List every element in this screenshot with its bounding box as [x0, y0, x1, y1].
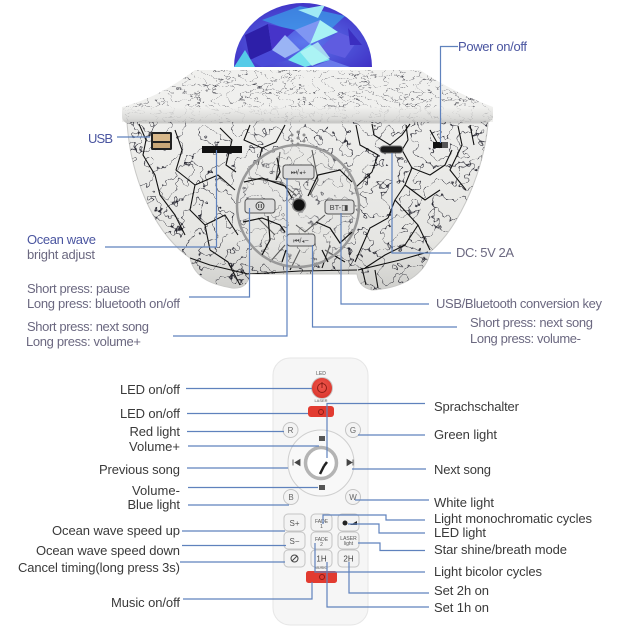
function buttons: FADE	[315, 519, 329, 525]
laser button	[308, 398, 334, 417]
remote labels right: Sprachschalter	[434, 399, 520, 414]
label: previous song button: Short press: next song	[470, 315, 593, 330]
colour button R	[283, 422, 298, 438]
colour button G	[346, 422, 360, 438]
bold cracks	[139, 124, 474, 288]
remote labels left: Ocean wave speed up	[52, 523, 180, 538]
label: previous song button: Long press: volume-	[470, 331, 581, 346]
remote labels right	[434, 399, 592, 615]
projector body	[120, 68, 496, 292]
remote labels right: White light	[434, 495, 494, 510]
remote labels left: Ocean wave speed down	[36, 543, 180, 558]
remote labels left: LED on/off	[120, 382, 180, 397]
led power button	[312, 371, 332, 398]
projector globe	[234, 3, 372, 67]
top leader lines	[105, 46, 458, 336]
remote body	[273, 358, 368, 625]
sd slot	[202, 146, 242, 153]
remote labels right: Green light	[434, 427, 497, 442]
function buttons: S−	[289, 537, 300, 546]
label: previous song button	[470, 315, 593, 346]
colour button G: G	[350, 426, 356, 435]
power switch	[433, 142, 448, 148]
centre hole	[292, 198, 306, 212]
button previous	[287, 234, 315, 246]
colour button B	[284, 490, 298, 504]
remote labels left: Red light	[130, 424, 180, 439]
remote control	[273, 358, 368, 625]
remote leader lines	[180, 388, 429, 607]
label: ocean wave bright adjust: bright adjust	[27, 247, 95, 262]
label: pause button: Short press: pause	[27, 281, 130, 296]
remote labels left: Volume-	[132, 483, 180, 498]
button previous: ⏮/◂−	[293, 238, 309, 245]
remote labels left: LED on/off	[120, 406, 180, 421]
remote labels right: Set 1h on	[434, 600, 489, 615]
label: pause button	[27, 281, 180, 311]
bowl	[127, 122, 488, 290]
label: next song button: Short press: next song	[27, 319, 149, 334]
remote labels left: Music on/off	[111, 595, 180, 610]
remote labels right: Light bicolor cycles	[434, 564, 542, 579]
function buttons: FADE	[315, 537, 329, 543]
remote labels left: Blue light	[128, 497, 180, 512]
function buttons: 1	[320, 524, 323, 530]
led power button: LED	[316, 371, 326, 377]
function buttons: LASER	[340, 536, 357, 542]
lid	[122, 70, 493, 122]
label: next song button	[26, 319, 149, 349]
label: power on/off: Power on/off	[458, 39, 527, 54]
usb port	[151, 132, 172, 150]
button bluetooth	[325, 200, 354, 214]
function buttons: S+	[289, 519, 300, 528]
colour button W	[346, 490, 360, 504]
button panel cracks	[243, 158, 352, 262]
remote labels left	[18, 382, 180, 610]
label: DC: DC: 5V 2A	[456, 245, 514, 260]
music button	[306, 565, 337, 583]
remote labels right: Next song	[434, 462, 491, 477]
remote labels right: Light monochromatic cycles	[434, 511, 592, 526]
function buttons: 1H	[316, 554, 327, 564]
label: ocean wave bright adjust	[27, 232, 96, 262]
colour button R: R	[288, 426, 294, 435]
bowl crack texture	[125, 122, 491, 292]
function buttons	[284, 514, 359, 567]
function buttons: 2	[320, 542, 323, 548]
rim band	[122, 107, 493, 124]
label: pause button: Long press: bluetooth on/off	[27, 296, 180, 311]
button next	[283, 165, 314, 179]
label: USB: USB	[88, 131, 113, 146]
label: ocean wave bright adjust: Ocean wave	[27, 232, 96, 247]
music button: MUSIC	[315, 565, 328, 570]
remote labels right: LED light	[434, 525, 486, 540]
label: conversion key: USB/Bluetooth conversion key	[436, 296, 602, 311]
remote labels left: Previous song	[99, 462, 180, 477]
button panel ring	[237, 145, 359, 267]
dc port	[380, 146, 403, 153]
button pause	[245, 199, 275, 213]
function buttons: light	[344, 541, 354, 547]
remote labels left: Volume+	[129, 439, 180, 454]
remote labels right: Star shine/breath mode	[434, 542, 567, 557]
speaker holes	[290, 130, 306, 146]
laser button: LASER	[314, 398, 328, 403]
colour button B: B	[288, 493, 294, 502]
navigation ring	[288, 430, 354, 496]
button bluetooth: BT-◨	[330, 203, 348, 212]
lid crack texture	[120, 68, 496, 123]
function buttons: 2H	[343, 554, 354, 564]
label: next song button: Long press: volume+	[26, 334, 141, 349]
remote labels right: Set 2h on	[434, 583, 489, 598]
button next: ⏭/◂+	[291, 170, 306, 176]
colour button W: W	[349, 493, 357, 502]
remote labels left: Cancel timing(long press 3s)	[18, 560, 180, 575]
